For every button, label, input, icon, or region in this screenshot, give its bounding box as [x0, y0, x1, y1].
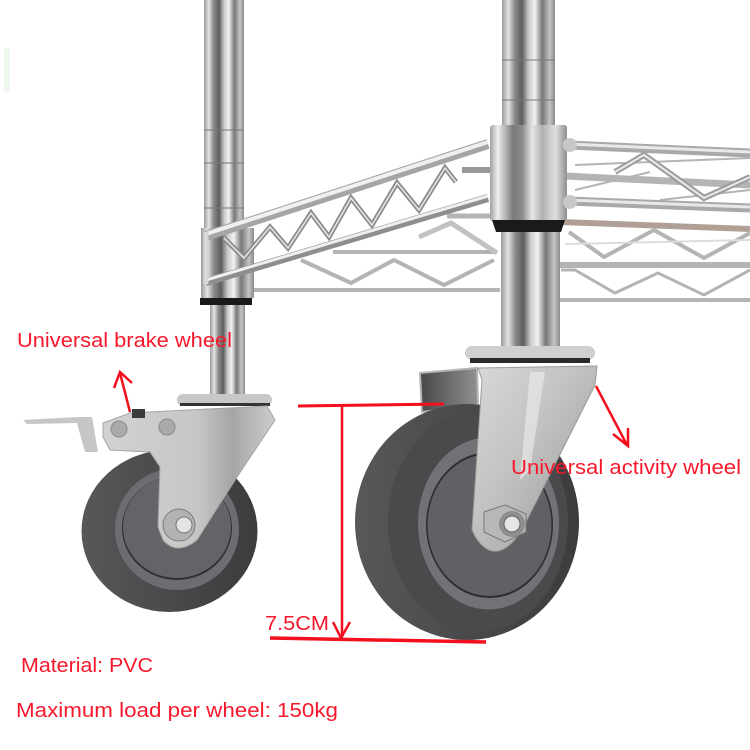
- arrow: brake wheel: [114, 372, 132, 412]
- left pole: [200, 0, 254, 395]
- left caster: universal brake wheel: [23, 394, 275, 612]
- label: material: Material: PVC: [21, 655, 153, 677]
- label: universal brake wheel: Universal brake wheel: [17, 330, 232, 352]
- green edge mark: [4, 48, 10, 92]
- dimension lines: 7.5CM: [270, 404, 486, 642]
- front right shelf rails: [563, 138, 750, 209]
- right caster: universal activity wheel: [355, 346, 597, 640]
- right pole with sleeve: [490, 0, 567, 347]
- label: maximum load: Maximum load per wheel: 150kg: [16, 700, 338, 722]
- label: wheel height: 7.5CM: [265, 613, 329, 635]
- label: universal activity wheel: Universal activity wheel: [511, 457, 741, 479]
- front shelf truss: [206, 142, 490, 284]
- rear wire shelf: [254, 158, 750, 300]
- arrow: activity wheel: [596, 386, 628, 446]
